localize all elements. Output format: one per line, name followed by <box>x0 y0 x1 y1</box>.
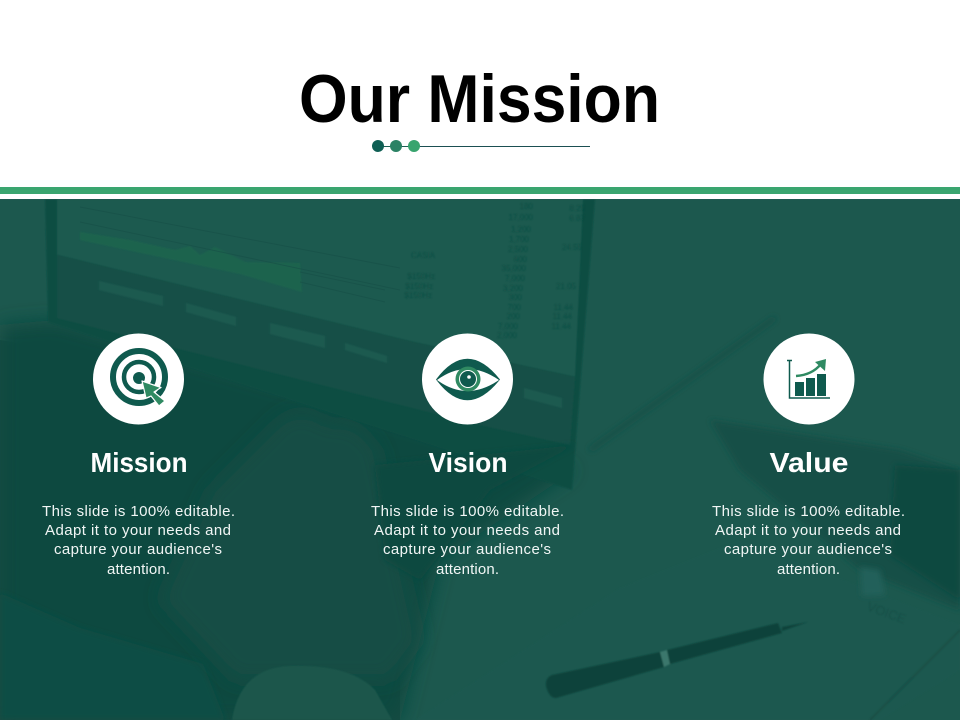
icon: eye <box>422 334 513 424</box>
table numbers on screen: 3,200 <box>503 284 524 293</box>
lower left paper <box>0 593 225 720</box>
chart area on screen <box>80 232 302 292</box>
table numbers on screen: 7,000 <box>505 274 526 283</box>
table numbers on screen: 7,000 <box>498 322 519 331</box>
table numbers on screen: 24.55 <box>562 243 583 252</box>
text: value description: capture your audience's <box>724 541 892 558</box>
heading: mission: Mission <box>90 447 188 478</box>
lower-centre keyboard shadow <box>374 464 446 575</box>
table numbers on screen: 11.44 <box>554 303 574 312</box>
table numbers on screen: 700 <box>508 303 522 312</box>
text: mission description: capture your audience's <box>54 541 222 558</box>
panel: vision <box>371 334 564 578</box>
icon: rising bar chart <box>764 334 854 424</box>
table numbers on screen: $150Hz <box>405 282 433 291</box>
panel: mission <box>42 334 235 578</box>
text: mission description: Adapt it to your needs and <box>45 522 231 539</box>
text: value description: attention. <box>777 561 840 578</box>
title: Our Mission <box>299 61 660 137</box>
keyboard and dark lower area <box>0 320 575 720</box>
text: vision description: Adapt it to your needs and <box>374 522 560 539</box>
grid lines <box>210 250 302 282</box>
text: vision description: This slide is 100% editable. <box>371 503 564 520</box>
screen upper panel <box>57 199 583 377</box>
text: value description: This slide is 100% editable. <box>712 503 905 520</box>
table numbers on screen: 2,000 <box>497 331 518 340</box>
dark object right <box>710 420 960 610</box>
table numbers on screen: 11.44 <box>553 312 573 321</box>
shadow line of tablet <box>590 318 775 450</box>
table numbers on screen: 11.44 <box>552 322 572 331</box>
text: vision description: attention. <box>436 561 499 578</box>
document lower edge <box>870 719 871 720</box>
text: value description: Adapt it to your needs and <box>715 522 901 539</box>
table numbers on screen: 17,000 <box>509 213 534 222</box>
INVOICE text on document: VOICE <box>865 599 908 627</box>
screen input fields <box>99 281 562 408</box>
table numbers on screen: $150Hz <box>407 272 435 281</box>
table numbers on screen: 1,200 <box>511 225 532 234</box>
table numbers on screen: 300 <box>509 293 523 302</box>
heading: vision: Vision <box>428 447 508 478</box>
table numbers on screen: $150Hz <box>404 291 432 300</box>
title ornament: three dots and line <box>372 140 590 152</box>
shirt sleeve at bottom <box>232 666 392 720</box>
table numbers on screen: 21.05 <box>556 282 577 291</box>
text: mission description: This slide is 100% editable. <box>42 503 235 520</box>
text: mission description: attention. <box>107 561 170 578</box>
lower-left solid dark base <box>396 718 400 720</box>
pen <box>546 622 808 698</box>
table numbers on screen: CASIA <box>411 251 436 260</box>
background photo: laptop, hands, documents and pen under teal overlay <box>0 199 960 720</box>
table numbers on screen: 180 <box>520 202 534 211</box>
panel: value <box>712 334 905 578</box>
heading: value: Value <box>770 447 848 478</box>
table numbers on screen: 8.25 <box>569 204 586 213</box>
document <box>415 540 960 720</box>
text: vision description: capture your audience's <box>383 541 551 558</box>
table numbers on screen: 2,500 <box>508 245 529 254</box>
icon: target with cursor arrow <box>93 334 184 424</box>
table numbers on screen: 6.87 <box>569 214 586 223</box>
hand <box>170 420 410 674</box>
table band on screen <box>57 255 575 445</box>
table numbers on screen: 35,000 <box>502 264 527 273</box>
table numbers on screen: 1,700 <box>509 235 530 244</box>
clip on document <box>861 567 882 594</box>
table numbers on screen: 600 <box>514 255 528 264</box>
green divider band <box>0 187 960 194</box>
table numbers on screen <box>404 202 586 340</box>
screen bezel <box>45 199 595 490</box>
table numbers on screen: 200 <box>507 312 521 321</box>
